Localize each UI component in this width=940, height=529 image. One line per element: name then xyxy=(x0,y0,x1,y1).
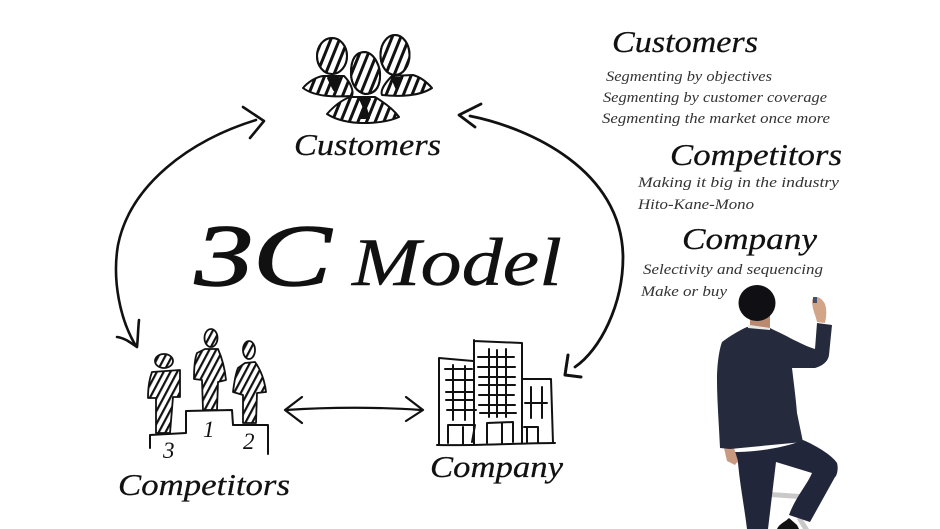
right person xyxy=(380,35,432,96)
marker xyxy=(813,297,817,303)
icon: company buildings xyxy=(437,340,555,445)
title: 3C Model xyxy=(194,208,562,305)
text block: company: Make or buy xyxy=(640,284,727,300)
raised hand xyxy=(812,297,826,323)
title: 3C Model: 3C xyxy=(194,208,333,305)
podium numbers: 2 xyxy=(243,429,254,454)
text block: company xyxy=(640,221,824,300)
label: Competitors: Competitors xyxy=(118,467,290,502)
podium xyxy=(150,410,268,454)
shoe xyxy=(777,518,799,529)
neck xyxy=(750,316,770,328)
third place figure xyxy=(148,354,180,433)
title: 3C Model: Model xyxy=(351,224,562,300)
text block: customers: Segmenting by customer coverage xyxy=(603,90,827,106)
center person xyxy=(327,52,399,123)
podium numbers: 3 xyxy=(162,438,174,463)
label: Customers: Customers xyxy=(294,127,441,162)
text block: customers: Segmenting by objectives xyxy=(606,69,772,85)
text block: customers xyxy=(602,24,830,127)
jacket xyxy=(717,323,832,449)
collar xyxy=(748,325,770,330)
text block: competitors: Making it big in the industry xyxy=(637,175,839,191)
figure: businessman writing xyxy=(717,285,838,529)
text block: company: Selectivity and sequencing xyxy=(643,262,824,278)
text block: customers: Segmenting the market once more xyxy=(602,111,830,127)
legs xyxy=(735,440,838,529)
icon: competitors on podium xyxy=(148,329,268,463)
text block: customers: Customers xyxy=(612,24,758,59)
step ladder xyxy=(770,492,809,529)
podium numbers: 1 xyxy=(203,417,214,442)
label: Company: Company xyxy=(430,449,563,484)
hair xyxy=(738,285,776,321)
podium numbers xyxy=(162,417,254,463)
text block: competitors: Competitors xyxy=(670,137,842,172)
first place figure xyxy=(194,329,226,410)
arrow: competitors and company xyxy=(285,397,423,423)
arrow: customers to company xyxy=(459,104,623,377)
second place figure xyxy=(233,341,266,423)
text block: competitors xyxy=(637,137,842,213)
text block: competitors: Hito-Kane-Mono xyxy=(637,197,755,213)
arrow: customers to competitors xyxy=(116,107,264,347)
left person xyxy=(303,38,353,96)
icon: customers group xyxy=(303,35,432,123)
lower hand xyxy=(724,448,738,465)
text block: company: Company xyxy=(682,221,817,256)
